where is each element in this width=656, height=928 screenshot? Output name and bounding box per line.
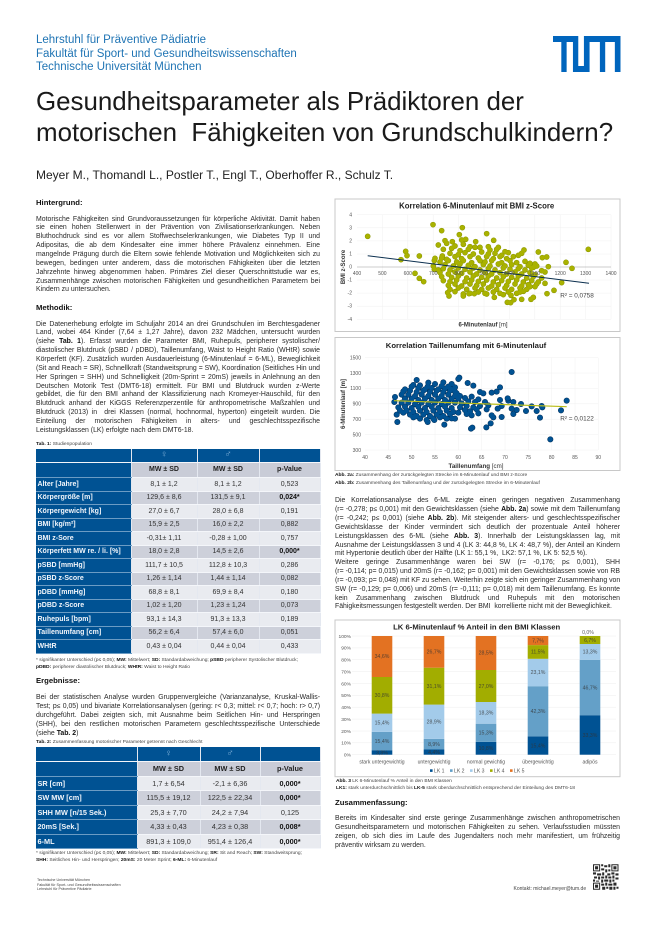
institution header: Lehrstuhl für Präventive Pädiatrie (36, 34, 206, 46)
text: correlation analysis: (r= -0,093; p= 0,048) mit KF zu sehen. Weiterhin zeigte sich ein geringer Zusammenhang von (335, 577, 620, 584)
table 1: study population: 0,024* (279, 494, 300, 501)
chart: Korrelation 6-Minutenlauf mit BMI z-Score: 700 (429, 271, 438, 277)
chart: LK 6-Minutenlauf % Anteil in den BMI Klassen: 26,7% (427, 650, 442, 656)
chart: LK 6-Minutenlauf % Anteil in den BMI Klassen: 13,3% (583, 650, 598, 656)
table 2: motor parameters: SW MW [cm] (38, 793, 82, 802)
footer address: Lehrstuhl für Präventive Pädiatrie (37, 887, 92, 891)
table 1: study population: 57,4 ± 6,0 (212, 629, 244, 636)
table 1: study population: 111,7 ± 10,5 (145, 562, 183, 569)
text: Ergebnisse: Bei der statistischen Analyse wurden Gruppenvergleiche (Varianzanalyse, Kruskal-Wallis- (36, 694, 320, 701)
text: Hintergrund: Kindern zu untersuchen. (36, 286, 111, 293)
text: Methodik: Blutdruck (2013) in drei Klassen (normal, hochnormal, hyperton) eingeteilt wurden. Die (36, 409, 320, 416)
chart: LK 6-Minutenlauf % Anteil in den BMI Klassen: untergewichtig (418, 760, 451, 766)
footnote: table 2: SHH: Seitliches Hin- und Herspringen; 20mS: 20 Meter Sprint; 6-ML: 6-Minutenlauf (36, 858, 217, 863)
table 2: motor parameters: ♀ (165, 748, 172, 759)
caption: figure 3: Abb. 3 LK 6-Minutenlauf % Anteil in den BMI Klassen (336, 779, 452, 784)
chart: Korrelation Taillenumfang mit 6-Minutenlauf: 500 (353, 432, 361, 438)
caption: table 1: Tab. 1: Studienpopulation (36, 442, 92, 446)
chart: LK 6-Minutenlauf % Anteil in den BMI Klassen: 100% (338, 634, 352, 640)
chart: LK 6-Minutenlauf % Anteil in den BMI Klassen: adipös (582, 760, 598, 766)
chart: LK 6-Minutenlauf % Anteil in den BMI Klassen: 11,5% (531, 650, 546, 656)
chart: Korrelation Taillenumfang mit 6-Minutenlauf (334, 337, 620, 471)
table 1: study population: pSBD z-Score (38, 575, 84, 582)
table 1: study population: 0,051 (281, 629, 298, 636)
legend: LK 3 (474, 768, 485, 774)
table 2: motor parameters: 24,2 ± 7,94 (212, 808, 248, 817)
text: correlation analysis: Ausnahme der Leistungsklassen 3 und 4 (LK 3: 44,8 %, LK 4: 48,7 %), der Anteil an Kindern (335, 542, 620, 549)
table 2: motor parameters: 4,33 ± 0,43 (150, 822, 187, 831)
chart: Korrelation 6-Minutenlauf mit BMI z-Score: 1100 (529, 271, 540, 277)
table 1: study population: 91,3 ± 13,3 (210, 616, 245, 623)
table 1: study population: Alter [Jahre] (38, 481, 79, 488)
chart: Korrelation 6-Minutenlauf mit BMI z-Score: 3 (349, 226, 352, 232)
footer address: Fakultät für Sport- und Gesundheitswissenschaften (37, 883, 121, 887)
table 2: motor parameters: MW ± SD (214, 764, 246, 773)
table 1: study population: 0,073 (281, 602, 298, 609)
text: Hintergrund: Motorische Fähigkeiten sind Grundvoraussetzungen für körperliche Aktivität. Damit haben (36, 216, 320, 223)
text: Ergebnisse (36, 694, 320, 737)
footer address (37, 878, 121, 891)
chart: Korrelation Taillenumfang mit 6-Minutenlauf: 90 (596, 455, 601, 461)
chart: Korrelation 6-Minutenlauf mit BMI z-Score: -2 (348, 290, 352, 296)
bar: adipös (580, 636, 600, 755)
chart: Korrelation Taillenumfang mit 6-Minutenlauf: 1100 (350, 386, 361, 392)
text: correlation analysis: (r= -0,242; p≤ 0,001) (siehe Abb. 2b). Mit steigender alters- und geschlechtsspezifischer (335, 515, 620, 522)
chart: LK 6-Minutenlauf % Anteil in den BMI Klassen: 34,6% (375, 654, 390, 660)
chart: LK 6-Minutenlauf % Anteil in den BMI Klassen: 28,9% (427, 720, 442, 726)
table 2: motor parameters: SHH MW [n/15 Sek.) (38, 808, 106, 817)
chart: Korrelation 6-Minutenlauf mit BMI z-Score: -4 (348, 317, 352, 323)
chart: Korrelation 6-Minutenlauf mit BMI z-Score: 900 (480, 271, 488, 277)
table 2: motor parameters: 0,000* (279, 779, 301, 788)
chart: LK 6-Minutenlauf % Anteil in den BMI Klassen: 40% (341, 705, 352, 711)
text: Methodik: (siehe Tab. 1). Erfasst wurden die Parameter BMI, Ruhepuls, peripherer systolischer/ (36, 338, 320, 345)
chart: Korrelation Taillenumfang mit 6-Minutenlauf: 6-Minutenlauf [m] (341, 379, 347, 429)
table 1: study population: 0,757 (281, 535, 298, 542)
table 1: study population: 27,0 ± 6,7 (148, 508, 180, 515)
chart: Korrelation Taillenumfang mit 6-Minutenlauf: 85 (572, 455, 578, 461)
chart: LK 6-Minutenlauf % Anteil in den BMI Klassen: 33,3% (583, 733, 598, 739)
caption: table 2: Tab. 2: Zusammenfassung motorischer Parameter getrennt nach Geschlecht (36, 740, 203, 745)
text: correlation analysis: SW (r= -0,129; p= 0,006) und 20mS (r= -0,111; p= 0,018) mit dem Taillenumfang. Es konnte (335, 586, 620, 593)
chart: LK 6-Minutenlauf % Anteil in den BMI Klassen: 80% (341, 658, 352, 664)
table 1: study population: Taillenumfang [cm] (38, 629, 101, 636)
table 1: study population: pDBD z-Score (38, 602, 84, 609)
text: correlation analysis: Die Korrelationsanalyse des 6-ML zeigte einen geringen negativen Zusammenhang (335, 497, 620, 504)
chart: Korrelation Taillenumfang mit 6-Minutenlauf: 700 (353, 417, 361, 423)
table 1: study population: 0,000* (279, 548, 300, 555)
chart: Korrelation 6-Minutenlauf mit BMI z-Score: 600 (404, 271, 412, 277)
chart: LK 6-Minutenlauf % Anteil in den BMI Klassen: 18,3% (479, 710, 494, 716)
text: Hintergrund: Zusammenhänge zwischen motorischen Fähigkeiten und gesundheitlichen Parametern bei (36, 278, 320, 284)
text: Methodik: Blutdruck anhand der KiGGS Referenzperzentile für anthropometrische Maßzahlen und (36, 400, 320, 407)
chart: Korrelation Taillenumfang mit 6-Minutenlauf: 55 (432, 455, 438, 461)
table 1: study population: 0,180 (281, 589, 298, 596)
text: Methodik: Die Datenerhebung erfolgte im Schuljahr 2014 an drei Grundschulen im Berchtesgadener (36, 321, 320, 328)
table 1: study population: 0,882 (281, 521, 298, 528)
footnote: table 1 (36, 658, 298, 670)
footer address: Technische Universität München (37, 878, 90, 882)
chart: LK 6-Minutenlauf % Anteil in den BMI Klassen: 15,4% (531, 744, 546, 750)
caption: figures 2a and 2b: Abb. 2b: Zusammenhang des Taillenumfang und der zurückgelegten Strecke im 6-Minutenlauf (335, 480, 540, 486)
heading: Ergebnisse: Ergebnisse: (36, 676, 80, 685)
table 1: study population: 1,23 ± 1,24 (210, 602, 245, 609)
table 1: study population: -0,31± 1,11 (147, 535, 181, 542)
table 1: study population: 28,0 ± 6,8 (212, 508, 244, 515)
text: Methodik: Her Springen = SHH) und Schnelligkeit (20m-Sprint = 20mS) jeweils in Anlehnung an den (36, 374, 320, 381)
text: Zusammenfassung: zeigen, ob sich dies im Laufe des Jugendalters noch mehr manifestiert, um frühzeitig (335, 833, 620, 840)
chart: Korrelation Taillenumfang mit 6-Minutenlauf: 75 (526, 455, 531, 461)
chart: Korrelation 6-Minutenlauf mit BMI z-Score: 1400 (605, 271, 617, 277)
icon: TUM logo (553, 36, 620, 72)
text: correlation analysis: (r= -0,114; p= 0,015) und 20mS (r= -0,162; p= 0,001) mit den Gewichtsklassen sowie von RB (335, 568, 620, 575)
chart: LK 6-Minutenlauf % Anteil in den BMI Klassen: LK 6-Minutenlauf % Anteil in den BMI Klassen (393, 622, 561, 632)
table 1: study population: 18,0 ± 2,8 (148, 548, 180, 555)
text: Ergebnisse: durchgeführt. Dabei zeigten sich, mit Ausnahme beim Seitlichen Hin- und Herspringen (36, 712, 320, 719)
chart: LK 6-Minutenlauf % Anteil in den BMI Klassen: 4,4% (428, 750, 440, 756)
icon: QR code (593, 864, 618, 890)
table 1: study population: MW ± SD (213, 466, 243, 473)
table 1: study population: 68,8 ± 8,1 (148, 589, 180, 596)
table 1: study population: 0,523 (281, 481, 298, 488)
text: Zusammenfassung: präventiv wirksam zu werden. (335, 842, 426, 849)
caption: figure 3: LK1: stark unterdurchschnittlich bis LK-5 stark überdurchschnittlich entsprechend der Einteilung des DMT6-18 (336, 786, 575, 791)
table 1: study population: 0,189 (281, 616, 298, 623)
table 1: study population: BMI [kg/m²] (38, 521, 76, 528)
chart: Korrelation Taillenumfang mit 6-Minutenlauf: 60 (456, 455, 461, 461)
table 1: study population: 131,5 ± 9,1 (210, 494, 245, 501)
chart: LK 6-Minutenlauf % Anteil in den BMI Klassen: 10,8% (479, 746, 494, 752)
chart: LK 6-Minutenlauf % Anteil in den BMI Klassen: 30% (341, 717, 352, 723)
legend (430, 768, 525, 774)
table 1: study population: Körpergewicht [kg] (38, 508, 101, 515)
table 1: study population: 129,6 ± 8,6 (146, 494, 181, 501)
title: motorischen Fähigkeiten von Grundschulkindern? (36, 119, 613, 147)
text: Hintergrund: bewegen, bedingen unter anderem, dass die motorischen Fähigkeiten über die letzten (36, 260, 320, 267)
bar: stark untergewichtig (372, 636, 392, 755)
chart: Korrelation Taillenumfang mit 6-Minutenlauf: Korrelation Taillenumfang mit 6-Minutenlauf (386, 341, 547, 350)
table 1: study population: -0,28 ± 1,00 (209, 535, 247, 542)
heading: Hintergrund: Hintergrund: (36, 198, 83, 207)
table 1: study population: BMI z-Sore (38, 535, 74, 542)
text: Methodik: diastolischer Blutdruck (pSBD / pDBD), Taillenumfang, Waist to Height Ratio (WHtR) sowie (36, 347, 320, 354)
text: Methodik (36, 320, 320, 434)
legend: LK 4 (494, 768, 505, 774)
footnote: table 1: * signifikanter Unterschied (p≤ 0,05); MW: Mittelwert; SD: Standardabweichung; pSBD peripherer Systolischer Blutdruck; (36, 658, 298, 662)
caption: figures 2a and 2b: Abb. 2a: Zusammenhang der zurückgelegten Strecke im 6-Minutenlauf und BMI z-Score (335, 473, 527, 478)
text: correlation analysis: kein Zusammenhang zwischen Blutdruck und Ruhepuls mit den motorischen (335, 595, 620, 602)
chart: LK 6-Minutenlauf % Anteil in den BMI Klassen: 0% (344, 752, 352, 758)
table 1: study population: p-Value (277, 466, 302, 473)
text: Hintergrund: sie einen hohen Stellenwert in der Prävention von Zivilisationserkrankungen. Neben (36, 224, 320, 231)
chart: LK 6-Minutenlauf % Anteil in den BMI Klassen: 30,8% (375, 693, 390, 699)
chart: LK 6-Minutenlauf % Anteil in den BMI Klassen: 6,7% (584, 638, 596, 644)
chart: LK 6-Minutenlauf % Anteil in den BMI Klassen: 70% (341, 669, 352, 675)
chart: LK 6-Minutenlauf % Anteil in den BMI Klassen: 42,3% (531, 709, 546, 715)
table 1: study population (36, 449, 321, 654)
table 1: study population: 0,44 ± 0,04 (210, 643, 245, 650)
table 2: motor parameters: 6-ML (38, 837, 55, 846)
table 1: study population: Ruhepuls [bpm] (38, 616, 91, 623)
chart: Korrelation 6-Minutenlauf mit BMI z-Score: Korrelation 6-Minutenlauf mit BMI z-Score (399, 202, 555, 210)
chart: Korrelation 6-Minutenlauf mit BMI z-Score: 1000 (504, 271, 515, 277)
table 1: study population: 0,286 (281, 562, 298, 569)
chart: Korrelation Taillenumfang mit 6-Minutenlauf: 65 (479, 455, 485, 461)
table 2: motor parameters: 0,008* (279, 822, 301, 831)
table 1: study population: Körperfett MW re. / li. [%] (38, 548, 121, 555)
chart: Korrelation Taillenumfang mit 6-Minutenlauf: 900 (353, 402, 361, 408)
heading: Zusammenfassung: Zusammenfassung: (335, 798, 408, 807)
chart: LK 6-Minutenlauf % Anteil in den BMI Klassen: 90% (341, 646, 352, 652)
chart: Korrelation Taillenumfang mit 6-Minutenlauf: 1300 (350, 371, 361, 377)
chart: LK 6-Minutenlauf % Anteil in den BMI Klassen: übergewichtig (522, 760, 554, 766)
chart: Korrelation 6-Minutenlauf mit BMI z-Score: 0 (349, 264, 352, 270)
table 2: motor parameters: 0,000* (279, 837, 301, 846)
table 2: motor parameters (36, 747, 321, 849)
legend: LK 2 (454, 768, 465, 774)
chart: LK 6-Minutenlauf % Anteil in den BMI Klassen: 10% (341, 741, 352, 747)
text: Hintergrund: mangelnde Prägung durch die Eltern sowie fehlende Motivation und Möglichkeiten sich zu (36, 251, 320, 258)
table 2: motor parameters: ♂ (226, 748, 234, 759)
chart: Korrelation 6-Minutenlauf mit BMI z-Score: 1300 (580, 271, 591, 277)
text: correlation analysis: Leistungsklassen des 6-ML (siehe Abb. 3). Innerhalb der Leistungsklassen lag, mit (335, 533, 620, 540)
table 1: study population: 0,43 ± 0,04 (146, 643, 181, 650)
text: Methodik: Leistungsklassen (LK) erfolgte nach dem DMT6-18. (36, 427, 193, 434)
chart: LK 6-Minutenlauf % Anteil in den BMI Klassen: 60% (341, 681, 352, 687)
table 1: study population: 0,191 (281, 508, 298, 515)
table 2: motor parameters: 20mS [Sek.] (38, 822, 79, 831)
caption: figure 3 (336, 778, 575, 791)
text: Methodik: Land, wobei 464 Kinder (7,64 ± 1,27 Jahre), davon 232 Mädchen, untersucht wurden (36, 329, 320, 336)
chart: LK 6-Minutenlauf % Anteil in den BMI Klassen: 20% (341, 729, 352, 735)
chart: Korrelation 6-Minutenlauf mit BMI z-Score: 1 (349, 252, 352, 258)
chart: LK 6-Minutenlauf % Anteil in den BMI Klassen: 7,7% (532, 638, 544, 644)
text: Ergebnisse: (siehe Tab. 2) (36, 730, 78, 737)
chart: LK 6-Minutenlauf % Anteil in den BMI Klassen: 15,3% (479, 730, 494, 736)
text: Ergebnisse: (SHH), bei den restlichen motorischen Parametern geschlechtsspezifische Unterschiede (36, 721, 320, 728)
table 2: motor parameters: 25,3 ± 7,70 (150, 808, 187, 817)
chart: Korrelation Taillenumfang mit 6-Minutenlauf: 40 (362, 455, 368, 461)
table 2: motor parameters: 1,7 ± 6,54 (152, 779, 185, 788)
table 1: study population: pSBD [mmHg] (38, 562, 85, 569)
text: correlation analysis: Fähigkeitsmessungen festgestellt werden. Der BMI korrellierte nicht mit der Beweglichkeit. (335, 603, 612, 610)
text: correlation analysis: Weitere geringe Zusammenhänge waren bei SW (r= -0,176; p≤ 0,001), SHH (335, 559, 620, 566)
table 1: study population: 1,02 ± 1,20 (146, 602, 181, 609)
table 1: study population: ♂ (224, 449, 232, 460)
text: Zusammenfassung: Bereits im Kindesalter sind erste geringe Zusammenhänge zwischen anthropometrischen (335, 815, 620, 822)
text: correlation analysis: Gewichtsklasse der Kinder vermindert sich deutlich der prozentuale Anteil höherer (335, 524, 620, 531)
chart: LK 6-Minutenlauf % Anteil in den BMI Klassen: normal gewichtig (467, 760, 505, 766)
chart: LK 6-Minutenlauf % Anteil in den BMI Klassen: 46,7% (583, 686, 598, 692)
chart: Korrelation 6-Minutenlauf mit BMI z-Score: -1 (348, 278, 352, 284)
legend: LK 5 (514, 768, 525, 774)
table 1: study population: 16,0 ± 2,2 (212, 521, 244, 528)
chart: Korrelation 6-Minutenlauf mit BMI z-Score: 500 (378, 271, 387, 277)
table 2: motor parameters: 115,5 ± 19,12 (146, 793, 191, 802)
chart: Korrelation 6-Minutenlauf mit BMI z-Score: 400 (353, 271, 361, 277)
table 2: motor parameters: 951,4 ± 126,4 (208, 837, 252, 846)
institution header: Fakultät für Sport- und Gesundheitswissenschaften (36, 48, 297, 60)
text: Methodik: gebildet, die für den BMI anhand der Klassifizierung nach Kromeyer-Hauschild, für den (36, 391, 320, 398)
text: Methodik: Körperfett (KF). Zusätzlich wurden Ausdauerleistung (6-Minutenlauf = 6-ML), Beweglichkeit (36, 356, 320, 363)
chart: LK 6-Minutenlauf % Anteil in den BMI Klassen: stark untergewichtig (359, 760, 405, 766)
table 1: study population: 1,26 ± 1,14 (146, 575, 181, 582)
table 1: study population: 0,433 (281, 643, 298, 650)
table 1: study population: 112,8 ± 10,3 (209, 562, 247, 569)
text: Hintergrund (36, 216, 320, 293)
title: Gesundheitsparameter als Prädiktoren der (36, 88, 524, 116)
table 2: motor parameters: SR [cm] (38, 779, 65, 788)
chart: LK 6-Minutenlauf % Anteil in den BMI Klassen: 3,8% (376, 750, 388, 756)
text: Hintergrund: Adipositas, die ab dem Kindesalter eine immer höhere Prävalenz einnehmen. Eine (36, 242, 320, 249)
heading: Methodik: Methodik: (36, 303, 72, 312)
table 1: study population: 56,2 ± 6,4 (148, 629, 180, 636)
institution header: Technische Universität München (36, 61, 202, 73)
chart: Korrelation Taillenumfang mit 6-Minutenlauf: 300 (353, 448, 361, 454)
table 1: study population: MW ± SD (149, 466, 179, 473)
chart: Korrelation 6-Minutenlauf mit BMI z-Score: 4 (349, 212, 352, 218)
institution header (36, 34, 297, 73)
text: correlation analysis: (r= -0,278; p≤ 0,001) mit den Gewichtsklassen (siehe Abb. 2a) sowie mit dem Taillenumfang (335, 506, 620, 513)
chart: Korrelation 6-Minutenlauf mit BMI z-Score: -3 (348, 304, 352, 310)
chart: Korrelation Taillenumfang mit 6-Minutenlauf: 1500 (350, 356, 361, 362)
text: Methodik: Deutschen Motorik Test (DMT6-18) ermittelt. Für BMI und Blutdruck wurden z-Werte (36, 382, 320, 390)
chart: LK 6-Minutenlauf % Anteil in den BMI Klassen: 8,9% (428, 742, 440, 748)
chart: Korrelation Taillenumfang mit 6-Minutenlauf: 50 (409, 455, 415, 461)
footnote: table 1: pDBD: peripherer diastolischer Blutdruck; WHtR: Waist to Height Ratio (36, 665, 190, 670)
table 2: motor parameters: 4,23 ± 0,38 (212, 822, 248, 831)
chart: LK 6-Minutenlauf % Anteil in den BMI Klassen: 0,0% (582, 630, 594, 636)
table 1: study population: 93,1 ± 14,3 (146, 616, 181, 623)
chart: LK 6-Minutenlauf % Anteil in den BMI Klassen (334, 620, 620, 778)
legend: LK 1 (434, 768, 445, 774)
title (36, 88, 613, 147)
table 1: study population: 15,9 ± 2,5 (148, 521, 180, 528)
text: Zusammenfassung: Gesundheitsparametern und motorischen Fähigkeiten zu sehen. Verlaufsstudien müssten (335, 824, 620, 831)
text: correlation analysis: mit Hypertonie deutlich über der Hälfte (LK 1: 55,1 %, LK2: 57,1 %, LK 5: 52,5 %). (335, 550, 587, 557)
caption: figures 2a and 2b (335, 472, 540, 486)
chart: LK 6-Minutenlauf % Anteil in den BMI Klassen: 31,1% (427, 684, 442, 690)
chart: Korrelation 6-Minutenlauf mit BMI z-Score: 800 (454, 271, 463, 277)
chart: Korrelation 6-Minutenlauf mit BMI z-Score: 1200 (555, 271, 566, 277)
chart: Korrelation 6-Minutenlauf mit BMI z-Score: 2 (349, 238, 352, 244)
table 2: motor parameters: -2,1 ± 6,36 (213, 779, 247, 788)
table 1: study population: 14,5 ± 2,6 (212, 548, 244, 555)
text: Zusammenfassung (335, 814, 620, 849)
text: Ergebnisse: Test; p≤ 0,05) und bivariate Korrelationsanalysen (gering: r< 0,3; mittel: r< 0,7; hoch: r> 0,7) (36, 703, 320, 710)
trend line (394, 401, 567, 407)
text: Methodik: Einteilung der motorischen Fähigkeiten in alters- und geschlechtsspezifische (36, 418, 320, 425)
bar: übergewichtig (528, 636, 548, 755)
chart: LK 6-Minutenlauf % Anteil in den BMI Klassen: 28,5% (479, 650, 494, 656)
table 1: study population: pDBD [mmHg] (38, 589, 85, 596)
table 2: motor parameters: 122,5 ± 22,34 (208, 793, 252, 802)
chart: Korrelation Taillenumfang mit 6-Minutenlauf: R² = 0,0122 (560, 415, 594, 422)
footnote: table 2 (36, 850, 302, 863)
chart: LK 6-Minutenlauf % Anteil in den BMI Klassen: 27,0% (479, 684, 494, 690)
text: correlation analysis (335, 496, 620, 610)
chart: LK 6-Minutenlauf % Anteil in den BMI Klassen: 15,4% (375, 739, 390, 745)
text: Hintergrund: Bluthochdruck sind es vor allem Stoffwechselerkrankungen, wie Diabetes Typ II und (36, 233, 320, 240)
table 1: study population: Körpergröße [m] (38, 494, 93, 501)
table 1: study population: 8,1 ± 1,2 (214, 481, 242, 488)
chart: Korrelation 6-Minutenlauf mit BMI z-Score (334, 198, 620, 332)
table 2: motor parameters: 0,000* (279, 793, 301, 802)
chart: Korrelation Taillenumfang mit 6-Minutenlauf: 80 (549, 455, 555, 461)
chart: Korrelation 6-Minutenlauf mit BMI z-Score: BMI z-Score (341, 249, 347, 284)
trend line (368, 256, 589, 283)
bar: normal gewichtig (476, 636, 496, 755)
table 1: study population: 8,1 ± 1,2 (150, 481, 178, 488)
table 2: motor parameters: p-Value (277, 764, 303, 773)
chart: LK 6-Minutenlauf % Anteil in den BMI Klassen: 23,1% (531, 670, 546, 676)
table 1: study population: 69,9 ± 8,4 (212, 589, 244, 596)
footnote: table 2: * signifikanter Unterschied (p≤ 0,05); MW: Mittelwert; SD: Standardabweichung; SR: Sit and Reach; SW: Standweitsprung; (36, 851, 302, 856)
bar: untergewichtig (424, 636, 444, 755)
text: Hintergrund: Jahrzehnte hinweg abgenommen haben. Primäres Ziel dieser Querschnittstudie war es, (36, 269, 320, 276)
table 1: study population: WHtR (38, 643, 57, 650)
contact: Kontakt: michael.meyer@tum.de (514, 886, 586, 892)
text: Methodik: (Sit and Reach = SR), Schnellkraft (Standweitsprung = SW), Koordination (Seitliches Hin und (36, 365, 320, 372)
table 2: motor parameters: MW ± SD (153, 764, 184, 773)
table 1: study population: ♀ (160, 449, 168, 460)
chart: Korrelation 6-Minutenlauf mit BMI z-Score: R² = 0,0758 (560, 292, 594, 299)
authors: Meyer M., Thomandl L., Postler T., Engl T., Oberhoffer R., Schulz T. (36, 168, 393, 182)
chart: LK 6-Minutenlauf % Anteil in den BMI Klassen: 15,4% (375, 720, 390, 726)
chart: Korrelation Taillenumfang mit 6-Minutenlauf: 70 (502, 455, 508, 461)
table 1: study population: 0,082 (281, 575, 298, 582)
table 2: motor parameters: 891,3 ± 109,0 (146, 837, 191, 846)
chart: LK 6-Minutenlauf % Anteil in den BMI Klassen: 50% (341, 693, 352, 699)
chart: Korrelation 6-Minutenlauf mit BMI z-Score: 6-Minutenlauf [m] (458, 322, 508, 328)
chart: Korrelation Taillenumfang mit 6-Minutenlauf: 45 (386, 455, 391, 461)
table 1: study population: 1,44 ± 1,14 (210, 575, 245, 582)
table 2: motor parameters: 0,125 (281, 808, 299, 817)
chart: Korrelation Taillenumfang mit 6-Minutenlauf: Taillenumfang [cm] (449, 463, 504, 470)
